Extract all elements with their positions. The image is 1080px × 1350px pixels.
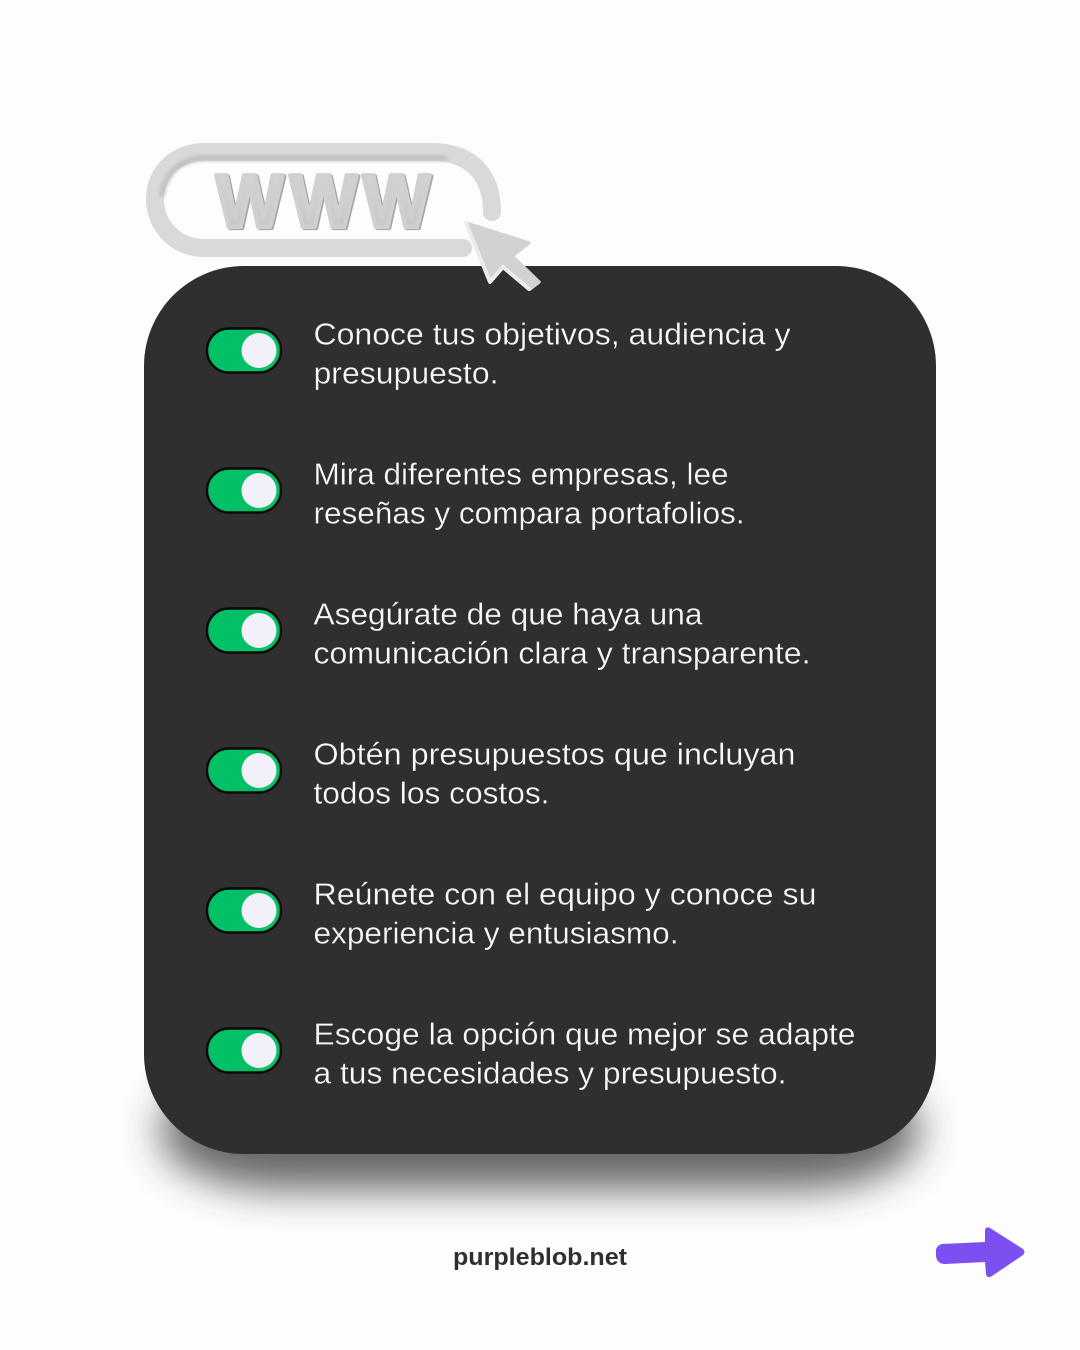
text: item 6: Escoge la opción que mejor se adapte — [314, 1016, 856, 1052]
text: item 2: reseñas y compara portafolios. — [314, 496, 744, 530]
text: item 1: Conoce tus objetivos, audiencia y — [314, 316, 791, 352]
footer website: purpleblob.net — [453, 1244, 627, 1271]
icon: www address bar: WWW — [218, 160, 432, 244]
toggle 1 — [207, 328, 281, 372]
toggle 4 — [207, 748, 281, 792]
icon: www address bar: WWW — [216, 159, 430, 243]
icon: www address bar — [155, 152, 492, 249]
toggle 5 — [207, 888, 281, 932]
text: item 3: comunicación clara y transparente. — [314, 636, 810, 670]
icon: cursor — [466, 223, 539, 289]
toggle 3 — [207, 608, 281, 652]
text: item 1: presupuesto. — [314, 356, 498, 390]
text: item 5: experiencia y entusiasmo. — [314, 916, 678, 950]
text: item 3 — [314, 596, 810, 670]
text: item 6: a tus necesidades y presupuesto. — [314, 1056, 786, 1090]
text: item 4: todos los costos. — [314, 776, 550, 810]
text: item 5 — [314, 876, 816, 950]
toggle 6 — [207, 1028, 281, 1072]
icon: next arrow — [936, 1227, 1024, 1277]
text: item 1 — [314, 316, 791, 390]
text: item 5: Reúnete con el equipo y conoce su — [314, 876, 816, 912]
toggle 2 — [207, 468, 281, 512]
panel shadow — [161, 1090, 919, 1190]
text: item 2: Mira diferentes empresas, lee — [314, 456, 728, 492]
text: item 6 — [314, 1016, 856, 1090]
panel: checklist — [144, 266, 936, 1154]
text: item 2 — [314, 456, 744, 530]
text: item 3: Asegúrate de que haya una — [314, 596, 703, 632]
text: item 4: Obtén presupuestos que incluyan — [314, 736, 796, 772]
text: item 4 — [314, 736, 796, 810]
